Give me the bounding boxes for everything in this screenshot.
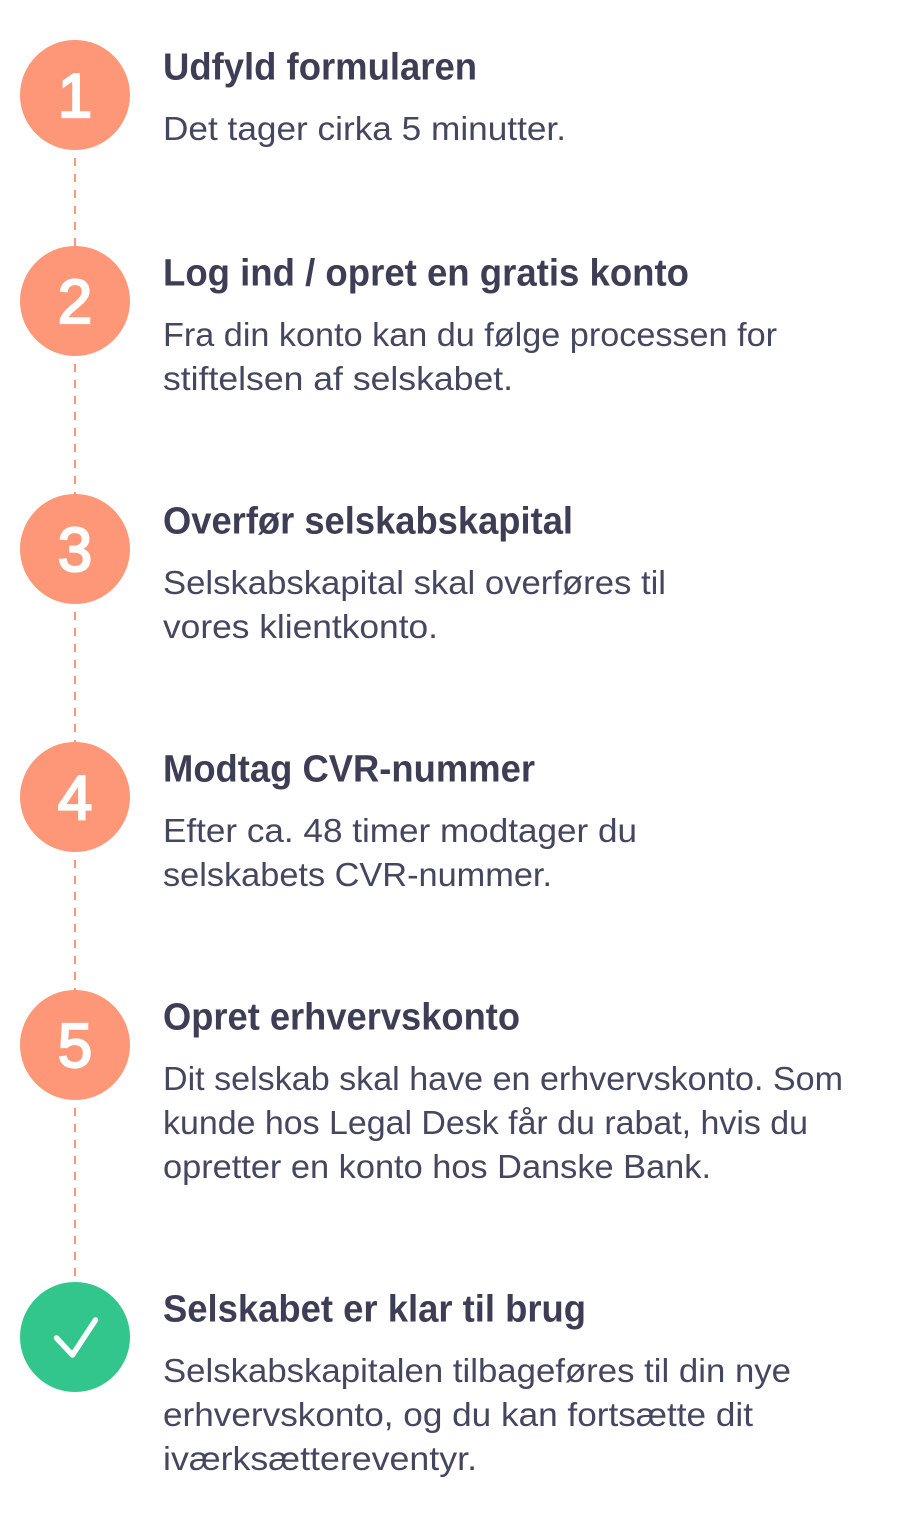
step 3 badge (20, 494, 130, 604)
step 5 heading: Opret erhvervskonto (163, 996, 520, 1038)
step 1 (20, 40, 566, 150)
step 3 (20, 494, 666, 645)
step 5 description: opretter en konto hos Danske Bank. (163, 1148, 711, 1185)
final step heading: Selskabet er klar til brug (163, 1288, 586, 1330)
step 4 badge: 4 (58, 764, 92, 833)
step 3 heading: Overfør selskabskapital (163, 500, 573, 542)
step 3 description: vores klientkonto. (163, 608, 438, 645)
icon: green check badge (20, 1282, 130, 1392)
step 5 description: Dit selskab skal have en erhvervskonto. Som (163, 1060, 843, 1097)
final step description: Selskabskapitalen tilbageføres til din nye (163, 1352, 791, 1389)
step 4 (20, 742, 637, 893)
step 5 description (163, 1060, 843, 1185)
final step (20, 1282, 791, 1477)
step 2 heading: Log ind / opret en gratis konto (163, 252, 689, 294)
step 2 (20, 246, 777, 397)
step 4 badge (20, 742, 130, 852)
step 2 description: Fra din konto kan du følge processen for (163, 316, 777, 353)
step 2 description: stiftelsen af selskabet. (163, 360, 513, 397)
final step description: iværksættereventyr. (163, 1440, 477, 1477)
step 1 heading: Udfyld formularen (163, 46, 477, 88)
step 3 badge: 3 (58, 516, 92, 585)
step 3 description (163, 564, 666, 645)
step 2 badge (20, 246, 130, 356)
step 5 description: kunde hos Legal Desk får du rabat, hvis du (163, 1104, 808, 1141)
final step description (163, 1352, 791, 1477)
step 5 (20, 990, 843, 1185)
step 1 badge (20, 40, 130, 150)
step 5 badge (20, 990, 130, 1100)
step 2 badge: 2 (58, 268, 92, 337)
step 4 description: Efter ca. 48 timer modtager du (163, 812, 637, 849)
final step description: erhvervskonto, og du kan fortsætte dit (163, 1396, 753, 1433)
step 4 heading: Modtag CVR-nummer (163, 748, 535, 790)
step 1 description: Det tager cirka 5 minutter. (163, 110, 566, 147)
step 4 description (163, 812, 637, 893)
step 2 description (163, 316, 777, 397)
step 4 description: selskabets CVR-nummer. (163, 856, 552, 893)
step 5 badge: 5 (58, 1012, 92, 1081)
step 1 badge: 1 (58, 62, 92, 131)
step 3 description: Selskabskapital skal overføres til (163, 564, 666, 601)
